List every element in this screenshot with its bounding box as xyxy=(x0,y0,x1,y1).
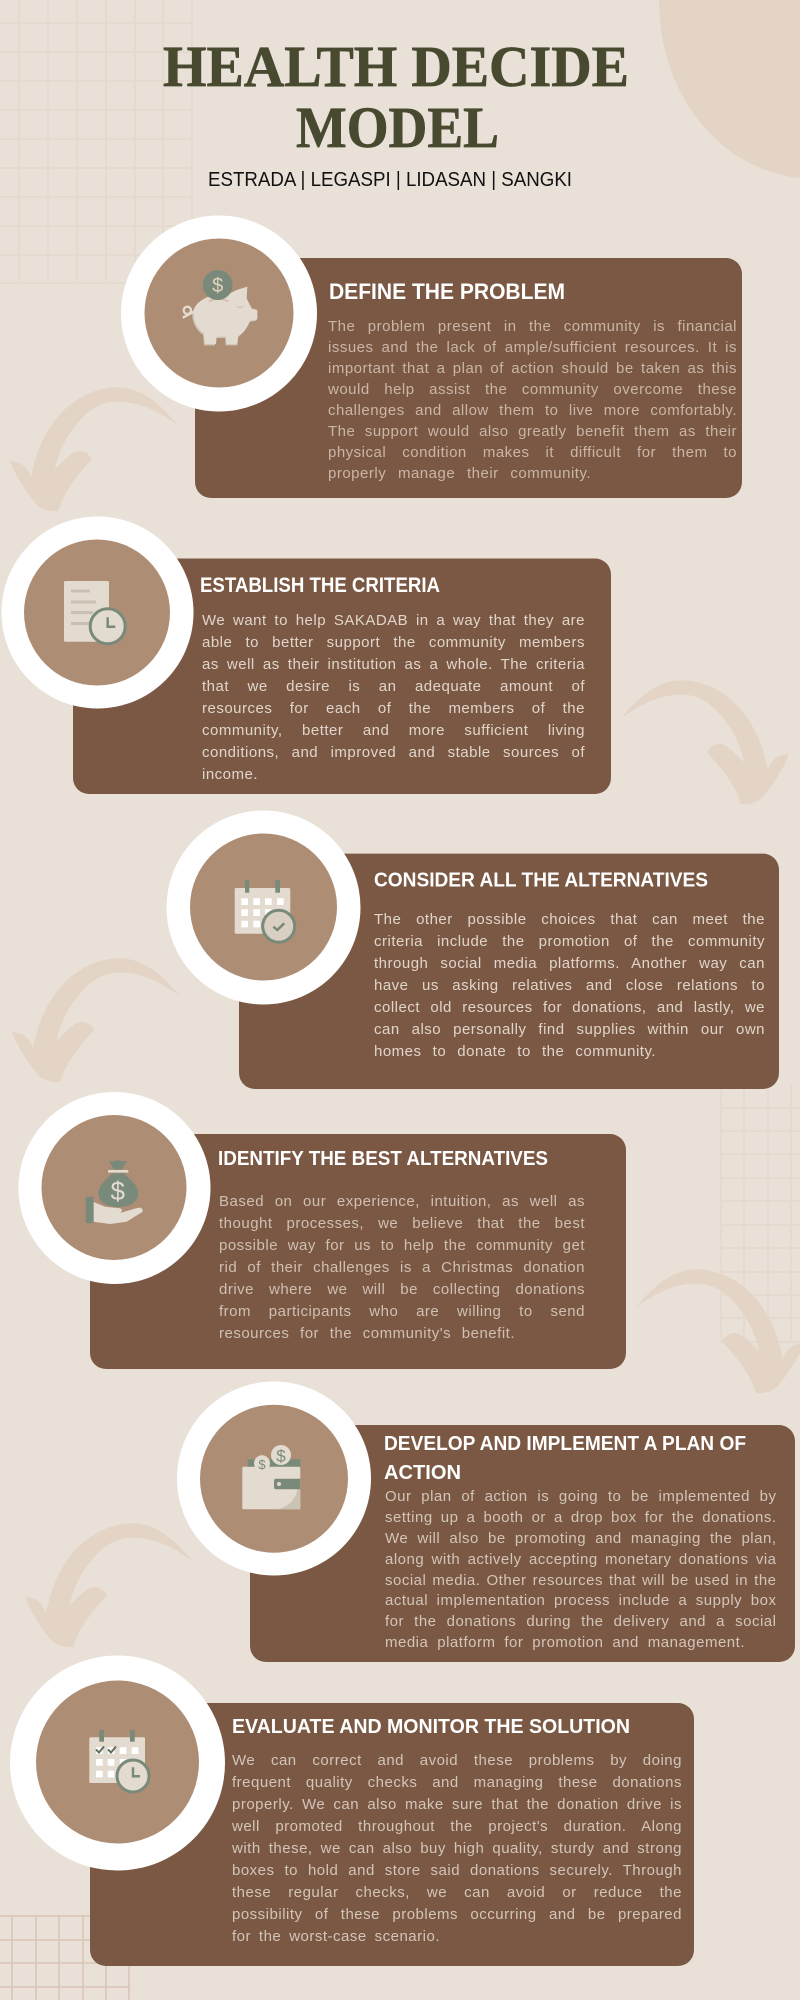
title: HEALTH DECIDE xyxy=(163,34,629,99)
body text xyxy=(374,911,765,1060)
icon: calendar with check xyxy=(235,880,295,942)
body text: community, better and more sufficient living xyxy=(202,722,585,739)
icon disc xyxy=(24,540,170,686)
icon: calendar with clock xyxy=(89,1730,149,1792)
body text: along with actively accepting monetary donations via xyxy=(385,1551,776,1568)
decorative corner shape xyxy=(659,0,800,178)
body text: Our plan of action is going to be implemented by xyxy=(385,1488,776,1505)
body text: can also personally find supplies within our own xyxy=(374,1021,765,1038)
body text: issues and the lack of ample/sufficient resources. It is xyxy=(328,339,737,356)
panel: identify the best alternatives xyxy=(18,1092,626,1369)
heading: ACTION xyxy=(384,1461,461,1484)
body text: The problem present in the community is financial xyxy=(328,318,737,335)
body text: possible way for us to help the community get xyxy=(219,1237,585,1254)
body text: with these, we can also buy high quality, sturdy and strong xyxy=(232,1840,682,1857)
icon: wallet with coins xyxy=(242,1445,300,1509)
icon ring xyxy=(177,1382,371,1576)
panel: develop and implement a plan of action xyxy=(177,1382,795,1662)
body text: social media. Other resources that will be used in the xyxy=(385,1572,776,1589)
body text: physical condition makes it difficult for them to xyxy=(328,444,737,461)
icon: wallet with coins: $ xyxy=(276,1446,286,1466)
body text xyxy=(232,1752,682,1945)
icon ring xyxy=(121,216,317,412)
body text: for the donations during the delivery and a social xyxy=(385,1613,776,1630)
body text xyxy=(385,1488,776,1651)
heading: ESTABLISH THE CRITERIA xyxy=(200,574,440,597)
title xyxy=(163,34,629,160)
heading: EVALUATE AND MONITOR THE SOLUTION xyxy=(232,1715,630,1738)
body text: possibility of these problems occurring and be prepared xyxy=(232,1906,682,1923)
icon: document with clock xyxy=(64,581,125,644)
body text: The support would also greatly benefit them as their xyxy=(328,423,737,440)
body text: these regular checks, we can avoid or reduce the xyxy=(232,1884,682,1901)
body text: collect old resources for donations, and lastly, we xyxy=(374,999,765,1016)
body text: properly. We can also make sure that the donation drive is xyxy=(232,1796,682,1813)
body text xyxy=(202,612,585,783)
body text: The other possible choices that can meet the xyxy=(374,911,765,928)
body text xyxy=(219,1193,585,1342)
heading: IDENTIFY THE BEST ALTERNATIVES xyxy=(218,1147,548,1170)
body text: resources for the community's benefit. xyxy=(219,1325,515,1342)
card background xyxy=(195,258,742,498)
body text: properly manage their community. xyxy=(328,465,591,482)
body text: important that a plan of action should be taken as this xyxy=(328,360,737,377)
body text: from participants who are willing to send xyxy=(219,1303,585,1320)
panel: evaluate and monitor the solution xyxy=(10,1656,694,1966)
panel: establish the criteria xyxy=(2,516,611,794)
icon ring xyxy=(10,1656,225,1870)
icon: piggy bank with coin: $ xyxy=(212,275,223,297)
heading: CONSIDER ALL THE ALTERNATIVES xyxy=(374,868,708,892)
icon: piggy bank with coin xyxy=(183,270,257,345)
icon ring xyxy=(18,1092,210,1284)
heading: DEFINE THE PROBLEM xyxy=(329,279,565,304)
body text: through social media platforms. Another way can xyxy=(374,955,765,972)
body text: able to better support the community members xyxy=(202,634,585,651)
icon disc xyxy=(144,238,294,388)
icon: money bag in hand xyxy=(86,1160,143,1224)
heading: DEVELOP AND IMPLEMENT A PLAN OF xyxy=(384,1432,746,1455)
icon: money bag in hand: $ xyxy=(110,1176,125,1206)
body text: setting up a booth or a drop box for the donations. xyxy=(385,1509,776,1526)
heading xyxy=(384,1432,746,1484)
body text: Based on our experience, intuition, as well as xyxy=(219,1193,585,1210)
arrow: step 4 to step 5 xyxy=(636,1269,800,1393)
card background xyxy=(73,558,611,794)
card background xyxy=(250,1425,795,1662)
body text: media platform for promotion and management. xyxy=(385,1634,745,1651)
arrow: step 1 to step 2 xyxy=(10,387,178,511)
body text: as well as their institution as a whole. The criteria xyxy=(202,656,585,673)
body text xyxy=(328,318,737,482)
icon disc xyxy=(190,834,337,980)
card background xyxy=(239,854,779,1089)
body text: rid of their challenges is a Christmas donation xyxy=(219,1259,585,1276)
body text: actual implementation process include a supply box xyxy=(385,1592,776,1609)
arrow: step 3 to step 4 xyxy=(12,958,180,1082)
body text: well promoted throughout the project's duration. Along xyxy=(232,1818,682,1835)
body text: would help assist the community overcome these xyxy=(328,381,737,398)
body text: We want to help SAKADAB in a way that they are xyxy=(202,612,585,629)
icon ring xyxy=(2,516,194,708)
body text: frequent quality checks and managing these donations xyxy=(232,1774,682,1791)
body text: for the worst-case scenario. xyxy=(232,1928,440,1945)
body text: homes to donate to the community. xyxy=(374,1043,656,1060)
icon disc xyxy=(36,1680,199,1844)
body text: have us asking relatives and close relations to xyxy=(374,977,765,994)
body text: income. xyxy=(202,766,258,783)
icon disc xyxy=(200,1405,348,1553)
body text: challenges and allow them to live more comfortably. xyxy=(328,402,737,419)
body text: that we desire is an adequate amount of xyxy=(202,678,585,695)
panel: consider all the alternatives xyxy=(166,810,779,1089)
subtitle: authors: ESTRADA | LEGASPI | LIDASAN | SANGKI xyxy=(208,169,572,191)
card background xyxy=(90,1134,626,1369)
icon ring xyxy=(166,810,360,1004)
body text: We can correct and avoid these problems by doing xyxy=(232,1752,682,1769)
body text: thought processes, we believe that the best xyxy=(219,1215,585,1232)
body text: conditions, and improved and stable sources of xyxy=(202,744,585,761)
icon: wallet with coins: $ xyxy=(258,1457,266,1472)
card background xyxy=(90,1703,694,1966)
body text: boxes to hold and store said donations securely. Through xyxy=(232,1862,682,1879)
body text: drive where we will be collecting donations xyxy=(219,1281,585,1298)
body text: resources for each of the members of the xyxy=(202,700,585,717)
title: MODEL xyxy=(296,95,499,160)
icon disc xyxy=(42,1115,186,1260)
body text: We will also be promoting and managing the plan, xyxy=(385,1530,776,1547)
body text: criteria include the promotion of the community xyxy=(374,933,765,950)
arrow: step 2 to step 3 xyxy=(621,680,789,804)
panel: define the problem xyxy=(121,216,742,498)
arrow: step 5 to step 6 xyxy=(25,1523,193,1647)
